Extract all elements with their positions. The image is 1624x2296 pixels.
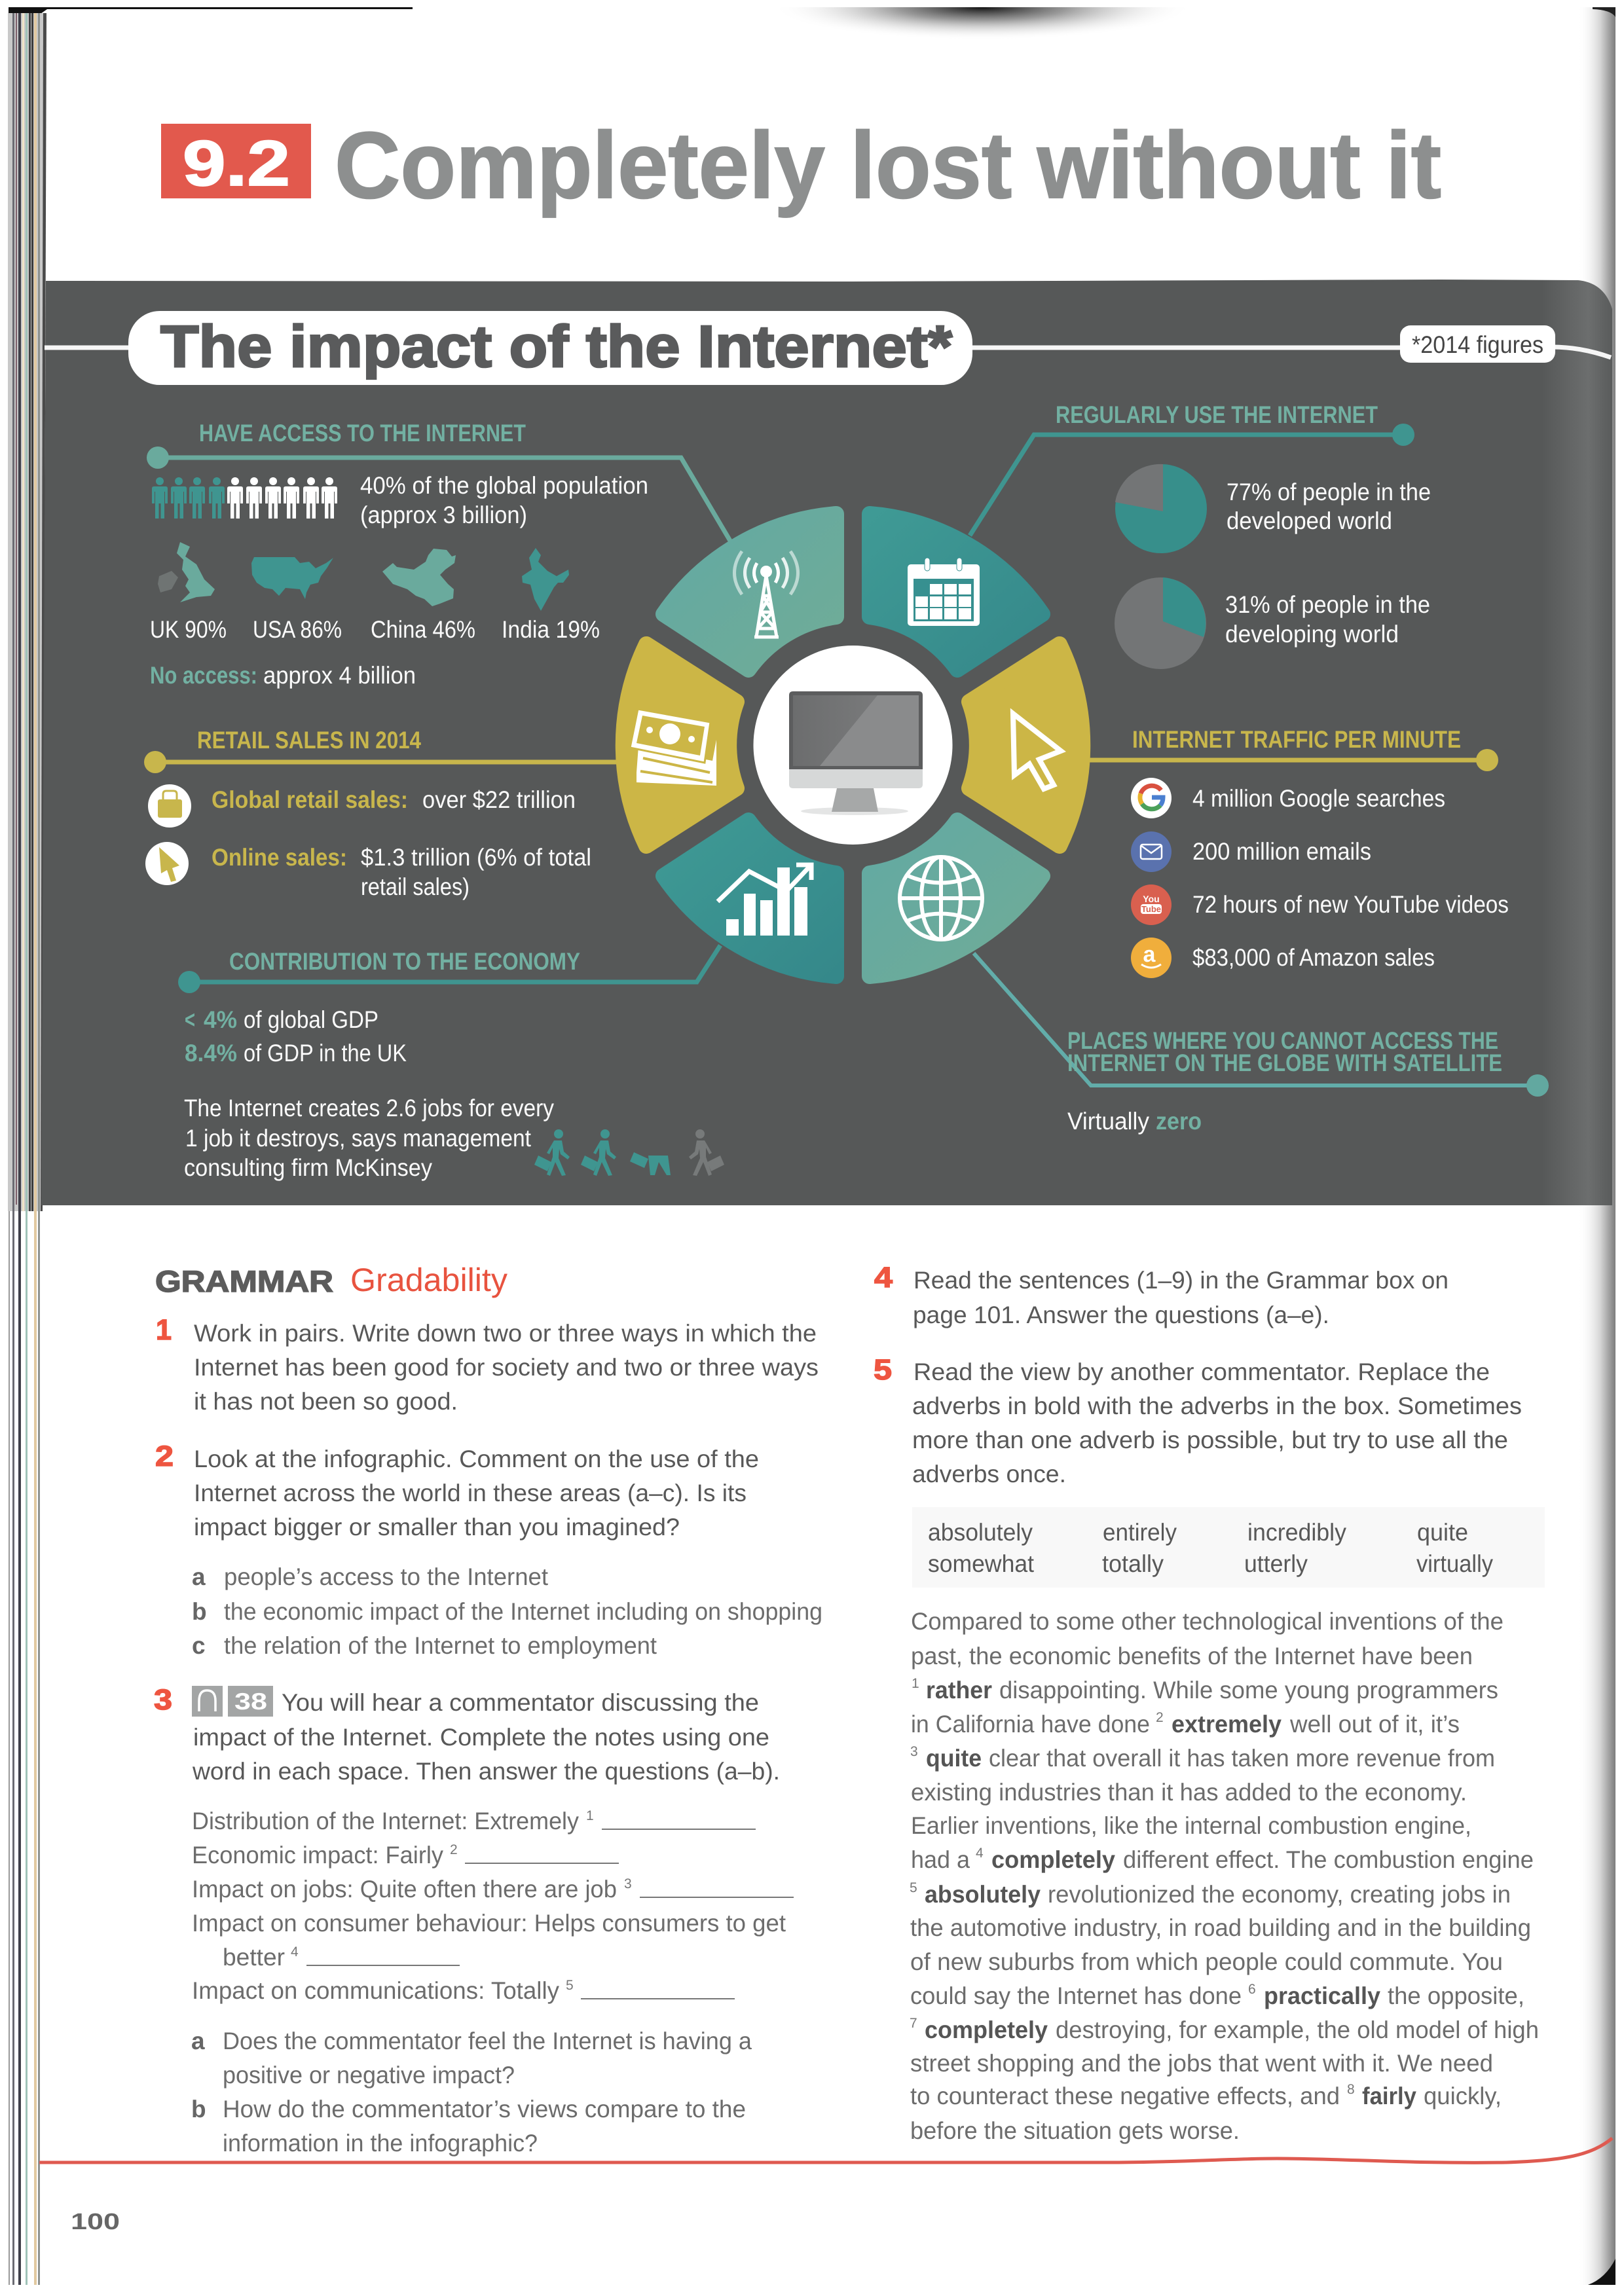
developed world text: developed world bbox=[1227, 507, 1392, 534]
icon: monitor bbox=[789, 691, 923, 815]
developed world text bbox=[1227, 479, 1431, 534]
global retail sales: Global retail sales: bbox=[212, 786, 408, 813]
exercise 2 bbox=[155, 1440, 759, 1540]
adverb box: incredibly bbox=[1247, 1519, 1346, 1546]
exercise 2 list: the relation of the Internet to employment bbox=[224, 1632, 657, 1659]
section: internet traffic bbox=[1131, 726, 1509, 978]
commentator passage: before the situation gets worse. bbox=[910, 2117, 1240, 2144]
commentator passage: rather bbox=[926, 1677, 992, 1704]
GDP figures: 8.4% bbox=[185, 1040, 237, 1066]
country percentages: China 46% bbox=[371, 616, 475, 643]
exercise 2 list: b bbox=[192, 1598, 207, 1625]
segment: lower right teal bbox=[870, 820, 1043, 976]
icon: audio track 38: 38 bbox=[234, 1688, 267, 1715]
section: regularly use the internet bbox=[1056, 401, 1431, 669]
no access line bbox=[150, 662, 416, 689]
commentator passage: existing industries than it has added to the economy. bbox=[911, 1779, 1467, 1806]
exercise 2 list: people’s access to the Internet bbox=[224, 1563, 549, 1590]
icon: bar chart with arrow bbox=[718, 865, 811, 936]
chapter number badge bbox=[161, 124, 311, 199]
icon: calendar bbox=[908, 558, 980, 626]
segment: right gold bbox=[969, 644, 1082, 846]
exercise 4: Read the sentences (1–9) in the Grammar box on bbox=[913, 1267, 1449, 1294]
global population text bbox=[360, 472, 648, 528]
GDP figures: < bbox=[185, 1006, 195, 1033]
icon: banknotes bbox=[630, 709, 716, 786]
developing world text bbox=[1225, 591, 1430, 647]
exercise 3 questions: How do the commentator’s views compare to the bbox=[223, 2096, 746, 2123]
commentator passage: had a bbox=[911, 1846, 970, 1873]
icon: YouTube: Tube bbox=[1141, 904, 1161, 914]
exercise 2: 2 bbox=[155, 1440, 174, 1472]
commentator passage: quite bbox=[926, 1745, 982, 1772]
section: places you cannot access bbox=[1067, 1027, 1502, 1135]
commentator passage: 2 bbox=[1156, 1710, 1164, 1725]
heading: traffic: INTERNET TRAFFIC PER MINUTE bbox=[1132, 726, 1461, 753]
jobs text: 1 job it destroys, says management bbox=[185, 1125, 532, 1152]
online sales: Online sales: bbox=[212, 844, 347, 871]
fill-in notes: Impact on communications: Totally bbox=[192, 1977, 559, 2004]
segment: lower left teal bbox=[663, 820, 836, 976]
commentator passage: disappointing. While some young programmers bbox=[999, 1677, 1498, 1704]
icon: large cursor bbox=[1013, 714, 1061, 789]
fill-in notes bbox=[192, 1808, 794, 2004]
jobs text: The Internet creates 2.6 jobs for every bbox=[184, 1095, 554, 1121]
adverb box: virtually bbox=[1416, 1550, 1493, 1577]
exercise 5: more than one adverb is possible, but try to use all the bbox=[912, 1427, 1508, 1453]
grammar heading bbox=[155, 1262, 507, 1298]
commentator passage bbox=[910, 1608, 1539, 2144]
icon: ten people bbox=[152, 477, 337, 519]
developing world text: developing world bbox=[1225, 621, 1399, 647]
segment: upper left teal bbox=[663, 514, 836, 670]
country percentages: India 19% bbox=[502, 616, 600, 643]
icon: audio track 38 bbox=[192, 1686, 273, 1717]
icon: globe bbox=[900, 857, 982, 939]
adverb box: quite bbox=[1417, 1519, 1468, 1546]
infographic title pill: The impact of the Internet* bbox=[160, 314, 952, 380]
virtually zero: zero bbox=[1156, 1108, 1202, 1135]
commentator passage: absolutely bbox=[925, 1881, 1041, 1908]
fill-in notes: 1 bbox=[586, 1808, 594, 1823]
icon: YouTube: You bbox=[1143, 894, 1160, 904]
commentator passage: 8 bbox=[1347, 2082, 1355, 2097]
page number: 100 bbox=[71, 2209, 120, 2234]
jobs text bbox=[184, 1095, 554, 1181]
heading: have access: HAVE ACCESS TO THE INTERNET bbox=[199, 420, 526, 446]
fill-in notes: Impact on consumer behaviour: Helps consumers to get bbox=[192, 1910, 786, 1937]
icon: signal tower bbox=[735, 551, 798, 637]
online sales bbox=[212, 844, 591, 900]
commentator passage: clear that overall it has taken more revenue from bbox=[989, 1745, 1495, 1772]
global population text: (approx 3 billion) bbox=[360, 501, 527, 528]
icon: shopping bag bbox=[148, 784, 191, 828]
commentator passage: revolutionized the economy, creating jobs in bbox=[1048, 1881, 1511, 1908]
no access line: No access: bbox=[150, 662, 257, 689]
global population text: 40% of the global population bbox=[360, 472, 648, 499]
text: Google: 4 million Google searches bbox=[1192, 785, 1445, 812]
commentator passage: Compared to some other technological inventions of the bbox=[911, 1608, 1504, 1635]
virtually zero bbox=[1067, 1108, 1202, 1135]
exercise 1: Work in pairs. Write down two or three ways in which the bbox=[194, 1320, 817, 1347]
exercise 4 bbox=[874, 1262, 1449, 1328]
commentator passage: practically bbox=[1264, 1982, 1380, 2009]
fill-in notes: better bbox=[223, 1944, 285, 1971]
commentator passage: different effect. The combustion engine bbox=[1123, 1846, 1534, 1873]
text: YouTube: 72 hours of new YouTube videos bbox=[1192, 891, 1509, 918]
exercise 2: impact bigger or smaller than you imagined? bbox=[194, 1514, 680, 1540]
heading: contribution: CONTRIBUTION TO THE ECONOMY bbox=[229, 948, 580, 975]
text: Amazon: $83,000 of Amazon sales bbox=[1192, 944, 1435, 971]
icon: UK map bbox=[158, 542, 215, 602]
commentator passage: 3 bbox=[910, 1744, 918, 1759]
icon: cursor bbox=[145, 842, 189, 885]
commentator passage: 4 bbox=[976, 1846, 984, 1861]
commentator passage: of new suburbs from which people could commute. You bbox=[910, 1948, 1503, 1975]
global retail sales bbox=[212, 786, 576, 813]
commentator passage: 5 bbox=[910, 1880, 917, 1895]
fill-in notes: Impact on jobs: Quite often there are job bbox=[192, 1876, 617, 1903]
GDP figures bbox=[185, 1006, 407, 1066]
exercise 3 questions: a bbox=[191, 2028, 205, 2054]
pie chart: developed world bbox=[1115, 464, 1207, 553]
commentator passage: the automotive industry, in road building and in the building bbox=[910, 1914, 1531, 1941]
fill-in notes: 2 bbox=[450, 1842, 458, 1857]
fill-in notes: Economic impact: Fairly bbox=[192, 1842, 443, 1868]
no access line: approx 4 billion bbox=[263, 662, 416, 689]
country percentages: UK 90% bbox=[150, 616, 227, 643]
exercise 3 questions: information in the infographic? bbox=[223, 2130, 538, 2157]
exercise 2 list: a bbox=[192, 1563, 206, 1590]
global retail sales: over $22 trillion bbox=[422, 786, 576, 813]
heading: places bbox=[1067, 1027, 1502, 1076]
commentator passage: to counteract these negative effects, and bbox=[910, 2083, 1340, 2109]
exercise 4: page 101. Answer the questions (a–e). bbox=[913, 1302, 1329, 1328]
commentator passage: completely bbox=[925, 2016, 1048, 2043]
commentator passage: in California have done bbox=[911, 1711, 1150, 1738]
exercise 3 questions bbox=[191, 2028, 752, 2157]
exercise 4: 4 bbox=[874, 1262, 893, 1294]
heading: retail sales: RETAIL SALES IN 2014 bbox=[197, 727, 421, 754]
icon: Amazon bbox=[1131, 938, 1172, 978]
exercise 1: it has not been so good. bbox=[194, 1388, 458, 1415]
chapter number badge: 9.2 bbox=[183, 127, 290, 199]
commentator passage: past, the economic benefits of the Internet have been bbox=[911, 1643, 1473, 1669]
exercise 3: impact of the Internet. Complete the notes using one bbox=[193, 1724, 769, 1751]
panel: left column bbox=[154, 1262, 822, 2157]
exercise 2 list: c bbox=[192, 1632, 206, 1659]
footer rule bbox=[39, 2138, 1612, 2162]
virtually zero: Virtually bbox=[1067, 1108, 1149, 1135]
page title: Completely lost without it bbox=[335, 113, 1441, 218]
exercise 2: Look at the infographic. Comment on the use of the bbox=[194, 1446, 759, 1472]
header rules bbox=[45, 347, 1611, 357]
heading: regularly use: REGULARLY USE THE INTERNET bbox=[1056, 401, 1378, 428]
icon: India map bbox=[522, 548, 569, 611]
developing world text: 31% of people in the bbox=[1225, 591, 1430, 618]
exercise 5: 5 bbox=[874, 1354, 892, 1386]
text: emails: 200 million emails bbox=[1192, 838, 1371, 865]
commentator passage: fairly bbox=[1362, 2083, 1416, 2109]
commentator passage: could say the Internet has done bbox=[910, 1982, 1242, 2009]
icon: email bbox=[1131, 831, 1172, 872]
commentator passage: street shopping and the jobs that went with it. We need bbox=[910, 2050, 1493, 2077]
segment: left gold bbox=[623, 644, 737, 846]
footnote pill bbox=[1400, 325, 1555, 363]
icon: Google bbox=[1131, 778, 1172, 818]
heading: places: PLACES WHERE YOU CANNOT ACCESS THE bbox=[1067, 1027, 1498, 1054]
adverb box: totally bbox=[1102, 1550, 1164, 1577]
commentator passage: 7 bbox=[910, 2016, 917, 2031]
section: retail sales bbox=[145, 727, 591, 900]
icon: walking job figures bbox=[534, 1129, 724, 1176]
online sales: retail sales) bbox=[361, 873, 470, 900]
fill-in notes: 3 bbox=[624, 1876, 632, 1891]
exercise 1: 1 bbox=[156, 1314, 172, 1346]
exercise 2 list bbox=[192, 1563, 822, 1659]
commentator passage: extremely bbox=[1172, 1711, 1282, 1738]
commentator passage: Earlier inventions, like the internal combustion engine, bbox=[911, 1812, 1471, 1839]
adverb box: utterly bbox=[1244, 1550, 1308, 1577]
exercise 2: Internet across the world in these areas (a–c). Is its bbox=[194, 1480, 747, 1506]
exercise 3 questions: positive or negative impact? bbox=[223, 2062, 515, 2088]
exercise 5: Read the view by another commentator. Replace the bbox=[913, 1358, 1490, 1385]
adverb box: somewhat bbox=[928, 1550, 1035, 1577]
commentator passage: destroying, for example, the old model of high bbox=[1056, 2016, 1539, 2043]
connector end dots bbox=[144, 424, 1549, 1097]
wheel of segments bbox=[623, 514, 1082, 976]
country percentages bbox=[150, 616, 600, 643]
commentator passage: 1 bbox=[912, 1676, 919, 1691]
icon: China map bbox=[382, 549, 456, 606]
panel: right column bbox=[874, 1262, 1545, 2144]
icon: Amazon: a bbox=[1143, 942, 1156, 967]
exercise 1 bbox=[156, 1314, 819, 1415]
exercise 5 bbox=[874, 1354, 1522, 1487]
GDP figures: of GDP in the UK bbox=[244, 1040, 407, 1066]
grammar heading: Gradability bbox=[350, 1262, 507, 1298]
exercise 3 bbox=[154, 1684, 780, 1785]
exercise 3: You will hear a commentator discussing the bbox=[282, 1689, 759, 1716]
panel: infographic band bbox=[41, 280, 1612, 1205]
developed world text: 77% of people in the bbox=[1227, 479, 1431, 505]
page edge stripes bbox=[8, 13, 46, 2285]
connector lines bbox=[155, 435, 1538, 1085]
fill-in notes: 4 bbox=[291, 1944, 299, 1959]
center circle bbox=[753, 646, 952, 845]
jobs text: consulting firm McKinsey bbox=[184, 1154, 432, 1181]
segment: upper right teal bbox=[870, 514, 1043, 670]
GDP figures: 4% bbox=[204, 1006, 237, 1033]
exercise 3: word in each space. Then answer the questions (a–b). bbox=[192, 1758, 780, 1785]
exercise 5: adverbs once. bbox=[912, 1461, 1066, 1487]
icon: USA map bbox=[251, 557, 333, 599]
commentator passage: completely bbox=[991, 1846, 1115, 1873]
fill-in notes: Distribution of the Internet: Extremely bbox=[192, 1808, 579, 1834]
exercise 3 questions: b bbox=[191, 2096, 206, 2123]
commentator passage: well out of it, it’s bbox=[1289, 1711, 1460, 1738]
exercise 2 list: the economic impact of the Internet including on shopping bbox=[224, 1598, 822, 1625]
section: contribution to the economy bbox=[184, 948, 724, 1181]
online sales: $1.3 trillion (6% of total bbox=[361, 844, 591, 871]
grammar heading: GRAMMAR bbox=[155, 1264, 333, 1298]
commentator passage: the opposite, bbox=[1388, 1982, 1524, 2009]
adverb box: entirely bbox=[1103, 1519, 1177, 1546]
commentator passage: quickly, bbox=[1424, 2083, 1502, 2109]
exercise 1: Internet has been good for society and two or three ways bbox=[194, 1354, 819, 1381]
fill-in notes: 5 bbox=[566, 1978, 574, 1993]
footnote pill: *2014 figures bbox=[1412, 331, 1543, 358]
pie chart: developing world bbox=[1115, 577, 1206, 669]
adverb box bbox=[912, 1507, 1545, 1588]
heading: places: INTERNET ON THE GLOBE WITH SATELLITE bbox=[1067, 1049, 1502, 1076]
country percentages: USA 86% bbox=[253, 616, 342, 643]
commentator passage: 6 bbox=[1248, 1982, 1256, 1997]
icon: YouTube bbox=[1131, 884, 1172, 925]
adverb box: absolutely bbox=[928, 1519, 1033, 1546]
exercise 3 questions: Does the commentator feel the Internet is having a bbox=[223, 2028, 752, 2054]
exercise 3: 3 bbox=[154, 1684, 172, 1716]
GDP figures: of global GDP bbox=[244, 1006, 378, 1033]
exercise 5: adverbs in bold with the adverbs in the box. Sometimes bbox=[912, 1393, 1522, 1419]
section: have access to the internet bbox=[150, 420, 648, 689]
